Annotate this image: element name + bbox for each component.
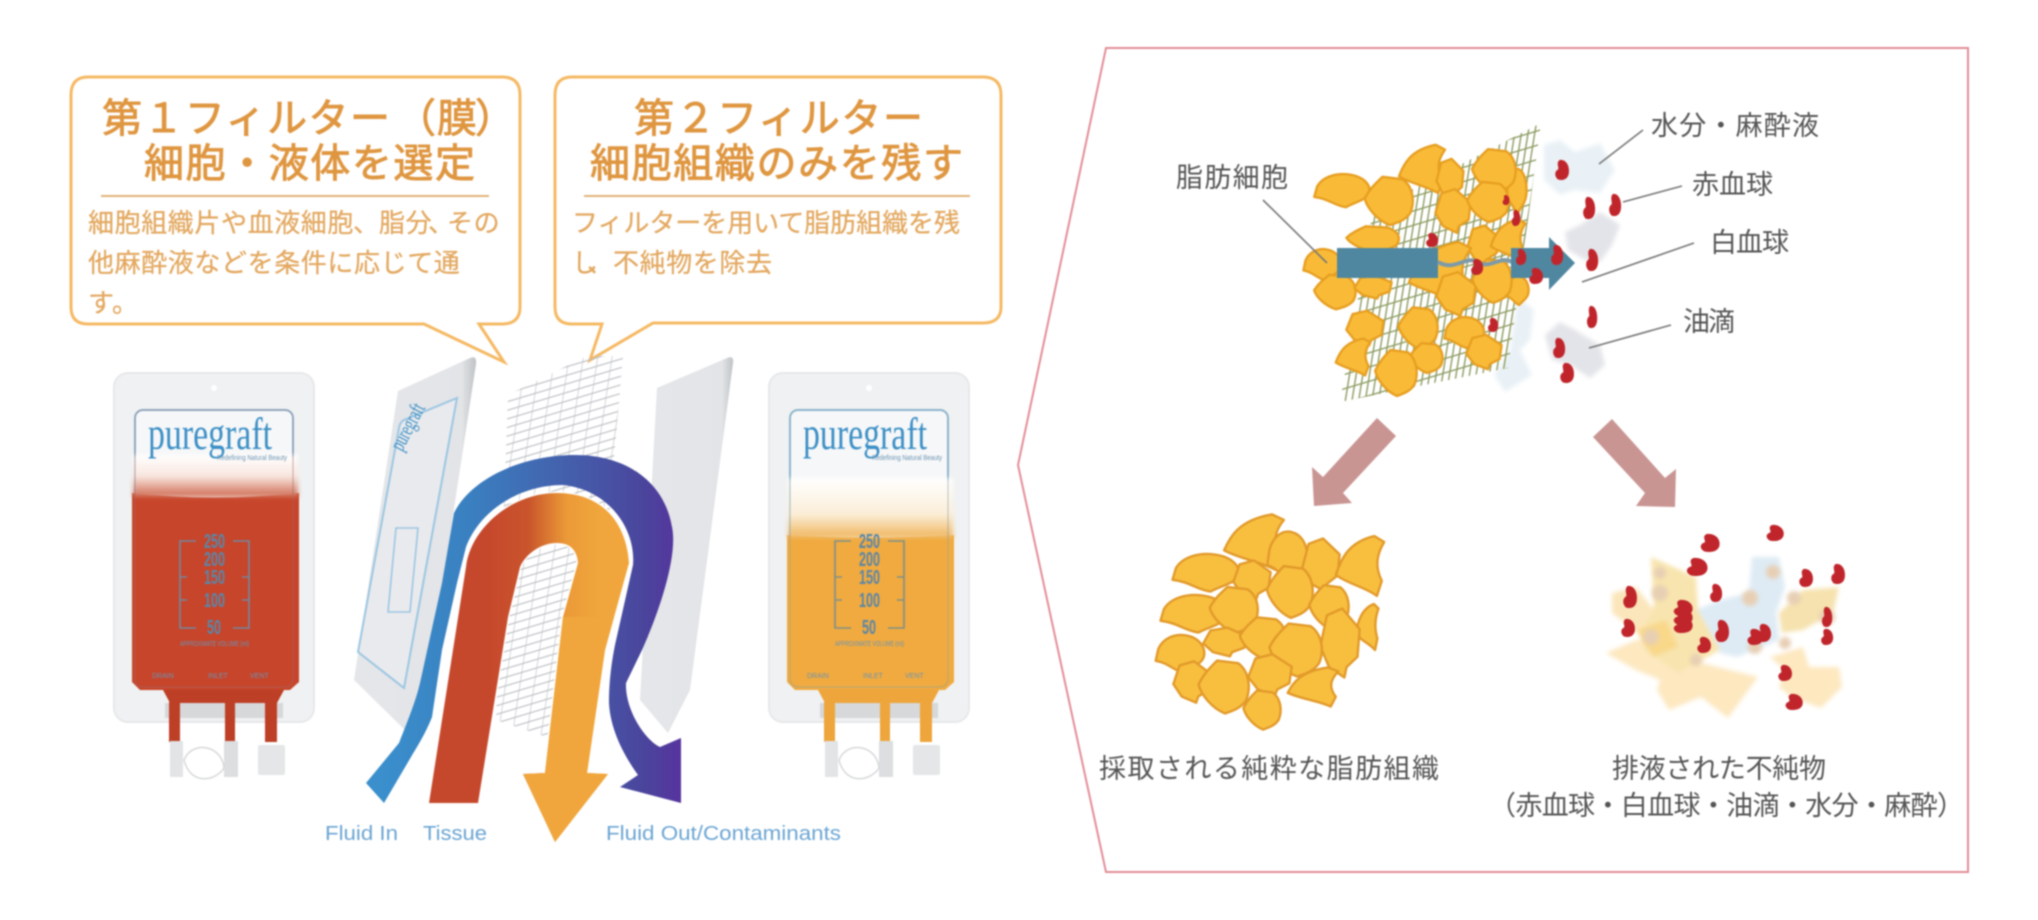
volume scale xyxy=(807,531,924,680)
volume scale: 200 xyxy=(204,549,225,571)
arrow: to pure tissue xyxy=(1312,418,1396,506)
logo: puregraft xyxy=(803,409,927,459)
body text: first filter: 他麻酔液などを条件に応じて通 xyxy=(88,248,460,278)
label: red blood cells xyxy=(1623,170,1773,202)
filter plate: front with logo xyxy=(354,357,476,733)
exploded filter assembly xyxy=(354,356,733,842)
volume scale: 100 xyxy=(204,590,225,612)
heading: first filter: （膜） xyxy=(396,97,515,141)
label: red blood cells: 赤血球 xyxy=(1692,170,1773,200)
volume scale: DRAIN xyxy=(807,673,829,680)
tubes and connectors xyxy=(824,702,940,779)
volume scale: 50 xyxy=(862,617,876,639)
speech bubble: second filter xyxy=(555,77,1001,360)
body text: first filter: 細胞組織片や血液細胞 xyxy=(88,208,354,238)
diagram: cells passing through mesh xyxy=(1303,123,1621,402)
volume scale: APPROXIMATE VOLUME (ml) xyxy=(835,641,904,648)
caption: pure fat tissue: 採取される純粋な脂肪組織 xyxy=(1099,754,1439,784)
label: white blood cells: 白血球 xyxy=(1710,228,1789,258)
illustration: discharged impurities xyxy=(1606,525,1845,718)
volume scale: VENT xyxy=(905,673,924,680)
body text: second filter: フィルターを用いて脂肪組織を残 xyxy=(572,208,960,238)
flow arrow: fluid in and out xyxy=(366,455,681,803)
flow arrow through mesh xyxy=(1337,237,1575,290)
volume scale: 150 xyxy=(859,567,880,589)
volume scale: 250 xyxy=(859,531,880,553)
bag: after, orange fluid: Redefining Natural Beauty xyxy=(872,455,942,462)
flow label: tissue: Tissue xyxy=(423,823,487,845)
caption: impurities: 排液された不純物 xyxy=(1612,754,1826,784)
bag: after, orange fluid xyxy=(769,373,969,779)
label: fat cells: 脂肪細胞 xyxy=(1176,163,1288,193)
flow arrow: tissue xyxy=(429,493,629,842)
label: white blood cells xyxy=(1582,228,1789,282)
panel: magnified filter outline xyxy=(1018,48,1968,872)
volume scale: 100 xyxy=(859,590,880,612)
label: oil droplets: 油滴 xyxy=(1683,307,1735,337)
label: oil droplets xyxy=(1589,307,1735,348)
filter plate: rear xyxy=(640,357,733,733)
volume scale: 150 xyxy=(204,567,225,589)
label: water and anaesthetic: 水分・麻酔液 xyxy=(1651,111,1819,141)
body text: second filter: し xyxy=(572,248,599,278)
heading: first filter: 細胞・液体を選定 xyxy=(144,142,475,186)
bag: before, red tissue xyxy=(114,373,314,779)
heading: first filter: 第１フィルター xyxy=(102,97,390,141)
tubes and connectors xyxy=(169,702,285,779)
volume scale: 250 xyxy=(204,531,225,553)
body text: first filter: す。 xyxy=(88,288,139,318)
volume scale: 50 xyxy=(207,617,221,639)
caption: impurities: （赤血球・白血球・油滴・水分・麻酔） xyxy=(1489,791,1964,821)
volume scale: INLET xyxy=(208,673,229,680)
red blood cells xyxy=(1621,525,1845,710)
flow label: fluid in: Fluid In xyxy=(325,823,398,845)
flow label: fluid out: Fluid Out/Contaminants xyxy=(606,823,841,845)
filter plate: front with logo: puregraft xyxy=(384,398,430,454)
illustration: pure fat tissue xyxy=(1156,514,1384,730)
label: water and anaesthetic xyxy=(1599,111,1819,164)
volume scale: INLET xyxy=(863,673,884,680)
red blood cells xyxy=(1426,160,1621,383)
label: fat cells xyxy=(1176,163,1327,263)
volume scale: VENT xyxy=(250,673,269,680)
heading: second filter: 第２フィルター xyxy=(634,97,923,141)
volume scale: 200 xyxy=(859,549,880,571)
body text: first filter: 、 xyxy=(428,208,455,238)
body text: second filter: 、 xyxy=(587,248,613,278)
heading: second filter: 細胞組織のみを残す xyxy=(590,142,963,186)
mesh xyxy=(1340,123,1541,402)
volume scale xyxy=(152,531,269,680)
body text: first filter: 、 xyxy=(353,208,380,238)
volume scale: DRAIN xyxy=(152,673,174,680)
logo: puregraft xyxy=(148,409,272,459)
body text: first filter: その xyxy=(447,208,500,238)
fat cells on mesh xyxy=(1303,145,1529,396)
body text: second filter: 不純物を除去 xyxy=(613,248,773,278)
volume scale: APPROXIMATE VOLUME (ml) xyxy=(180,641,249,648)
contaminant clouds xyxy=(1494,140,1620,392)
filter mesh xyxy=(496,356,623,737)
speech bubble: first filter xyxy=(71,77,520,362)
bag: before, red tissue: Redefining Natural Beauty xyxy=(217,455,287,462)
body text: first filter: 脂分 xyxy=(379,208,432,238)
arrow: to impurities xyxy=(1593,419,1676,507)
